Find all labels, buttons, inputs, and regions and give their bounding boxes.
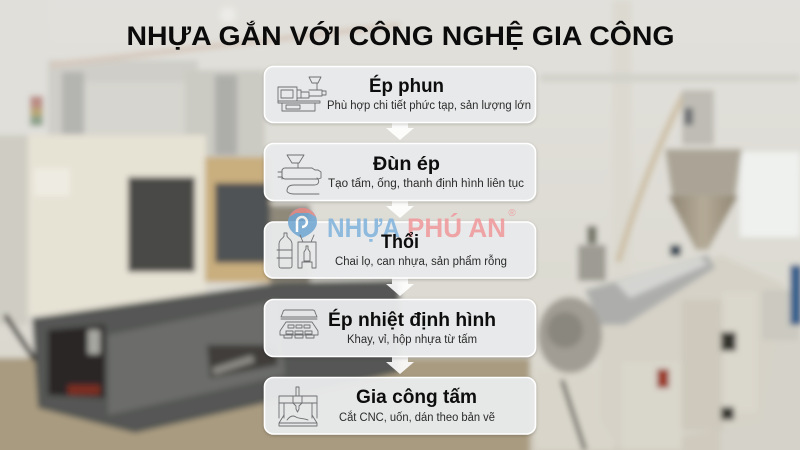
- heading: Ép nhiệt định hình: [328, 309, 496, 331]
- left wall: [0, 0, 48, 290]
- title: NHỰA GẮN VỚI CÔNG NGHỆ GIA CÔNG: [126, 21, 674, 51]
- watermark logo: NHỰA: [327, 213, 400, 243]
- heading: Ép phun: [369, 75, 444, 97]
- panel: Thổi: [264, 208, 536, 278]
- arrow 1: [386, 122, 414, 140]
- watermark logo: [288, 208, 516, 243]
- heading: Thổi: [381, 232, 419, 253]
- arrow 3: [386, 278, 414, 296]
- watermark logo: ®: [508, 208, 516, 219]
- injection machine base: [32, 280, 400, 433]
- panel: Ép nhiệt định hình: [264, 300, 536, 356]
- arrow 2: [386, 200, 414, 218]
- icon: thermoformed tray: [280, 310, 318, 338]
- extruder line: [535, 370, 615, 450]
- description: Khay, vỉ, hộp nhựa từ tấm: [347, 334, 477, 346]
- icon: extruder: [278, 155, 321, 194]
- arrow 4: [386, 356, 414, 374]
- panel: Ép phun: [264, 66, 536, 122]
- icon: injection molding machine: [278, 77, 326, 111]
- description: Cắt CNC, uốn, dán theo bản vẽ: [339, 411, 495, 424]
- panel: Gia công tấm: [264, 378, 536, 434]
- floor: [0, 358, 530, 450]
- description: Chai lọ, can nhựa, sản phẩm rỗng: [335, 255, 507, 268]
- heading: Gia công tấm: [356, 387, 477, 408]
- icon: CNC machine: [279, 387, 317, 426]
- panel: Đùn ép: [264, 144, 536, 200]
- description: Tạo tấm, ống, thanh định hình liên tục: [328, 178, 524, 190]
- rear ceiling band: [50, 22, 400, 68]
- watermark logo: PHÚ AN: [407, 212, 506, 243]
- hopper: [665, 149, 742, 196]
- heading: Đùn ép: [373, 154, 440, 175]
- description: Phù hợp chi tiết phức tạp, sản lượng lớn: [327, 100, 531, 112]
- injection machine body: [0, 135, 28, 325]
- icon: blow molded bottle: [277, 233, 316, 268]
- right wall and columns: [612, 0, 632, 300]
- signal lamp: [30, 96, 43, 108]
- rear shutter: [85, 82, 185, 134]
